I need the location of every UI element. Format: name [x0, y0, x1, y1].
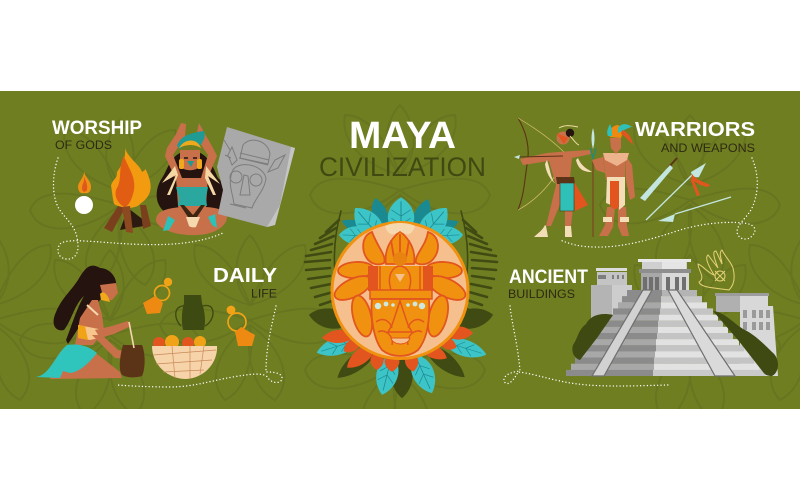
- subheading: buildings: BUILDINGS: [508, 287, 575, 301]
- infographic canvas: [0, 91, 800, 409]
- mask medallion: [331, 222, 469, 358]
- decorative mandala pattern: [0, 104, 800, 409]
- heading: ancient: ANCIENT: [509, 267, 588, 288]
- right bush: [713, 311, 778, 376]
- brow band: [370, 290, 432, 299]
- torso: [176, 178, 208, 222]
- icon: earring right: [227, 306, 255, 346]
- feather crest: [609, 125, 622, 138]
- face: [100, 283, 118, 300]
- club: [668, 158, 677, 168]
- heading: daily: DAILY: [213, 265, 278, 287]
- top crescent: [385, 223, 415, 234]
- subheading: of gods: OF GODS: [55, 138, 112, 152]
- face: [180, 150, 200, 170]
- headdress: [177, 131, 205, 149]
- crown block: [368, 252, 433, 291]
- eye dots: [375, 302, 425, 309]
- arrow: [519, 156, 563, 157]
- arms: [95, 321, 131, 338]
- left staircase: [592, 290, 652, 376]
- boots: [534, 225, 572, 237]
- subheading: life: LIFE: [251, 286, 277, 300]
- nose and cheek lines: [376, 301, 424, 345]
- anklets: [603, 217, 629, 222]
- panel: daily life: [36, 265, 282, 387]
- left tower: [591, 268, 632, 320]
- icon: earring left: [143, 278, 172, 314]
- weapons group: [640, 158, 731, 222]
- torso: [603, 155, 626, 180]
- leaves around the mask: [307, 196, 495, 398]
- figure: warrior with feathers: [592, 124, 635, 236]
- icon: bonfire: [104, 148, 151, 233]
- right tower: [715, 293, 778, 376]
- dotted connector: warriors: [560, 158, 757, 247]
- heading: worship: WORSHIP: [52, 118, 142, 139]
- eyes and face paint: [184, 157, 197, 159]
- spear: [590, 128, 596, 237]
- figure: kneeling woman: [36, 266, 145, 379]
- teal skirt: [36, 344, 97, 378]
- stepped pyramid: [566, 290, 765, 376]
- belt and loincloth: [180, 205, 205, 220]
- feathers: [162, 166, 178, 195]
- heading: warriors: WARRIORS: [635, 119, 755, 141]
- dotted connector: daily: [117, 306, 282, 387]
- dotted connector: worship: [54, 158, 223, 259]
- stone carving: [217, 127, 295, 227]
- torso: [75, 300, 104, 345]
- panel: worship of gods: [52, 118, 295, 259]
- loincloth: [606, 177, 625, 210]
- face: [371, 299, 429, 356]
- title: maya: MAYA: [349, 115, 456, 157]
- feather: [545, 158, 592, 184]
- icon: dark jug: [176, 295, 213, 330]
- tasseled spear: [646, 175, 692, 220]
- icon: outlined hand: [698, 250, 734, 290]
- panel: ancient buildings: [504, 250, 778, 386]
- head: [610, 138, 621, 154]
- icon: basket of fruit: [152, 335, 217, 379]
- figure: archer: [514, 118, 592, 237]
- subheading: and weapons: AND WEAPONS: [661, 141, 755, 155]
- long hair: [157, 150, 226, 214]
- loincloth: [556, 177, 575, 184]
- short spear: [675, 197, 731, 214]
- legs: [546, 185, 566, 226]
- top and necklace: [78, 325, 104, 340]
- body and arms: [520, 150, 591, 188]
- head and hair: [556, 132, 570, 144]
- title: civilization: CIVILIZATION: [319, 152, 486, 182]
- legs: [599, 207, 629, 236]
- mouth: [391, 338, 410, 344]
- raised arms: [165, 123, 186, 180]
- icon: torch with white ball: [75, 171, 93, 214]
- teal top: [176, 187, 208, 206]
- ponytail hair: [54, 266, 116, 344]
- dotted connector: ancient: [504, 306, 668, 386]
- figure: worshipping woman: [156, 123, 227, 235]
- temple on top: [638, 259, 691, 290]
- arms: [592, 157, 605, 173]
- panel: central title and mask: [305, 115, 497, 398]
- bow and string: [518, 118, 528, 210]
- palm fronds: [305, 211, 497, 316]
- left bush: [572, 314, 613, 360]
- right staircase: [668, 290, 735, 376]
- anklets: [163, 216, 175, 231]
- panel: warriors and weapons: [514, 118, 757, 247]
- background panel: [0, 91, 800, 409]
- legs: [50, 352, 122, 379]
- crown petals: [338, 261, 374, 279]
- clay pot and stick: [120, 345, 145, 377]
- crossed legs: [156, 207, 227, 235]
